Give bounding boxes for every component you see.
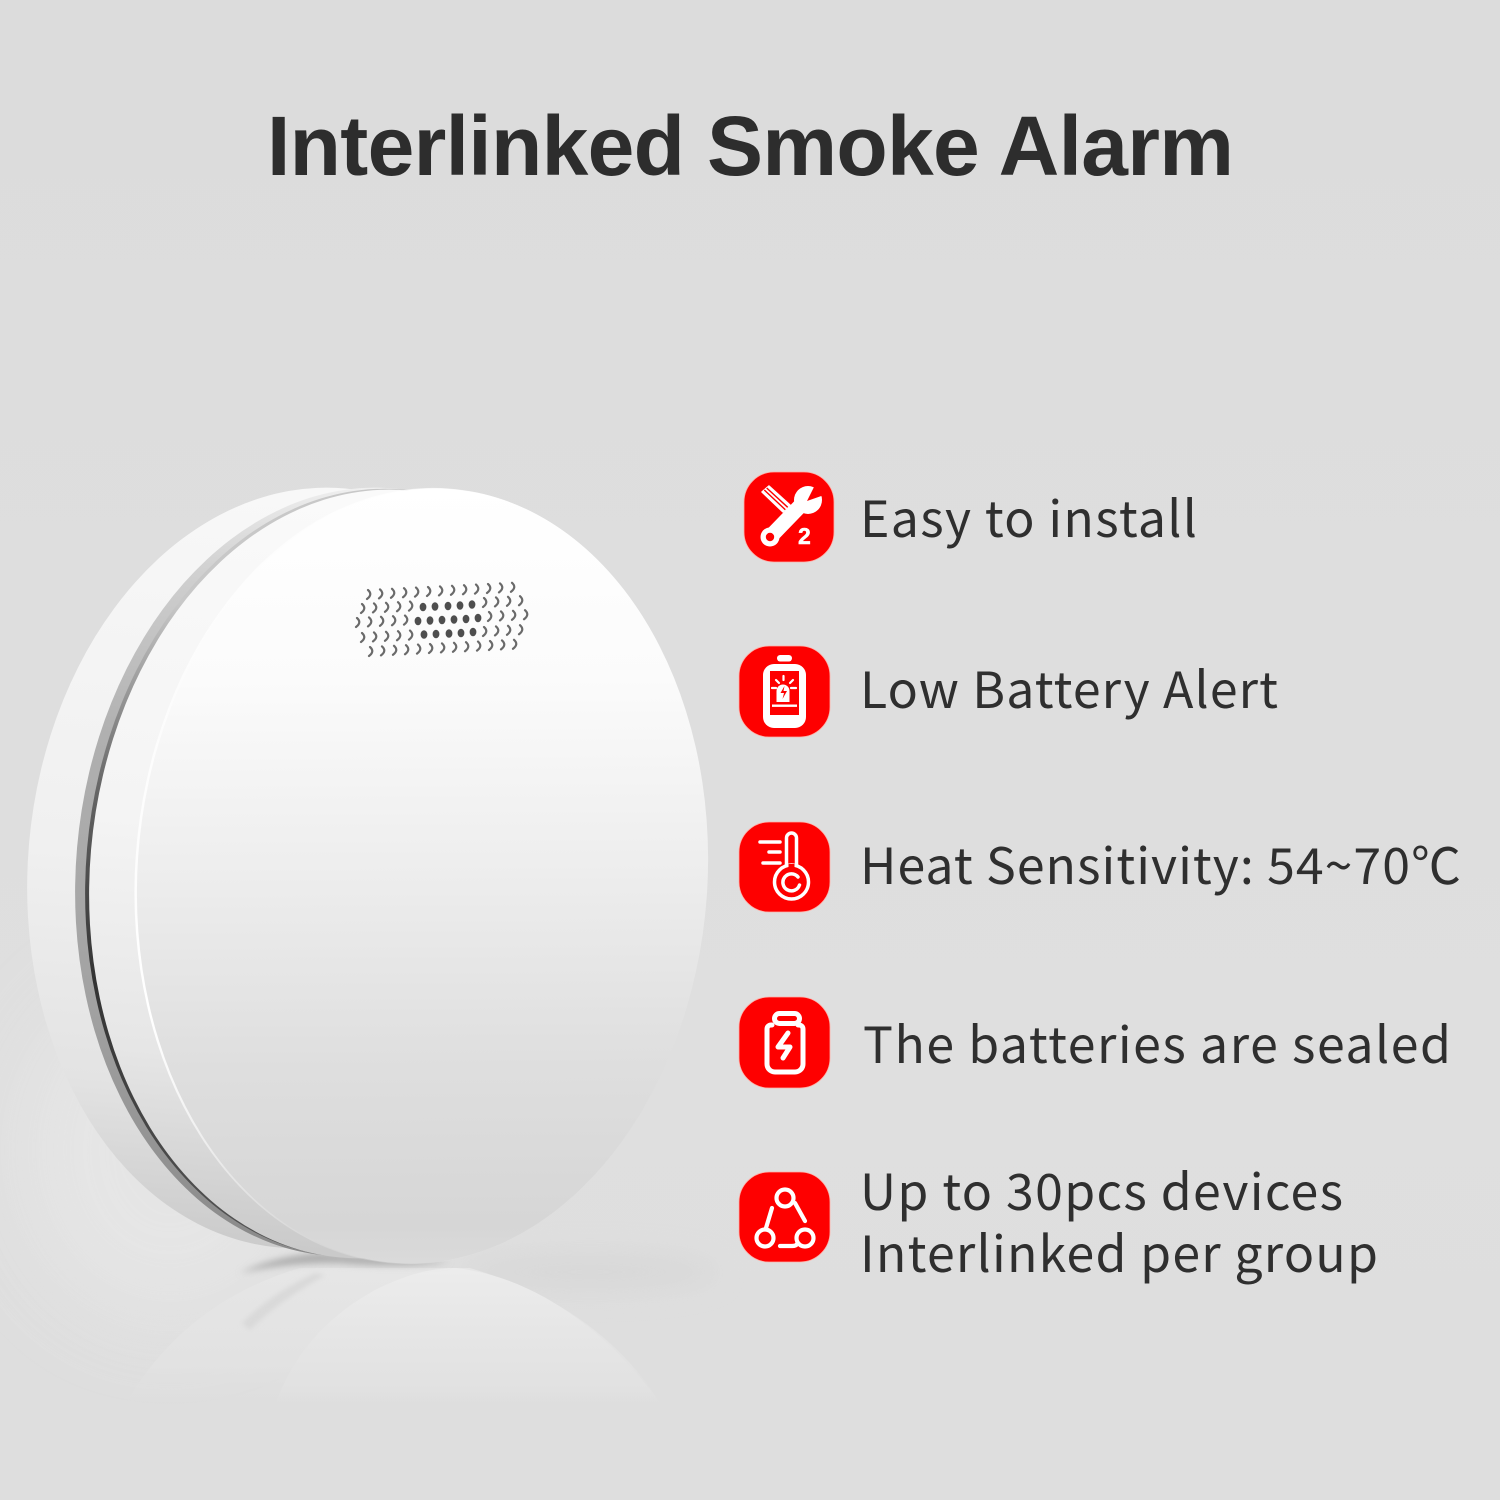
label: Up to 30pcs devices <box>860 1153 1343 1225</box>
soft glow on floor <box>20 980 320 1320</box>
back casing <box>0 464 628 1272</box>
icon: thermometer <box>739 822 830 912</box>
feature: heat sensitivity <box>739 822 1461 912</box>
floor reflection <box>125 1268 662 1405</box>
icon: wrench and screwdriver: 2 <box>798 523 811 549</box>
dark centre holes <box>415 600 481 639</box>
groove <box>44 464 676 1280</box>
front face highlight <box>109 468 733 1284</box>
icon: wrench and screwdriver <box>744 472 834 562</box>
label: Interlinked per group <box>860 1215 1378 1287</box>
feature: sealed batteries <box>739 997 1451 1088</box>
label: Low Battery Alert <box>860 651 1278 723</box>
icon: linked nodes <box>739 1172 830 1262</box>
front rim <box>58 466 690 1282</box>
label: Heat Sensitivity: 54~70℃ <box>860 827 1461 899</box>
feature: low battery alert <box>739 646 1278 737</box>
title: Interlinked Smoke Alarm <box>267 99 1234 193</box>
icon: battery with beacon <box>739 646 830 737</box>
outer crescent holes <box>356 583 527 656</box>
feature: easy to install <box>744 472 1197 562</box>
icon: sealed battery <box>739 997 830 1088</box>
smoke alarm product <box>0 464 734 1405</box>
feature: interlinked devices <box>739 1153 1378 1287</box>
label <box>860 1153 1378 1287</box>
floor shadow right <box>460 1252 720 1292</box>
contact shadow <box>240 1253 450 1273</box>
speaker holes <box>356 583 527 656</box>
label: Easy to install <box>860 480 1197 552</box>
front face <box>111 469 734 1283</box>
label: The batteries are sealed <box>863 1006 1451 1078</box>
